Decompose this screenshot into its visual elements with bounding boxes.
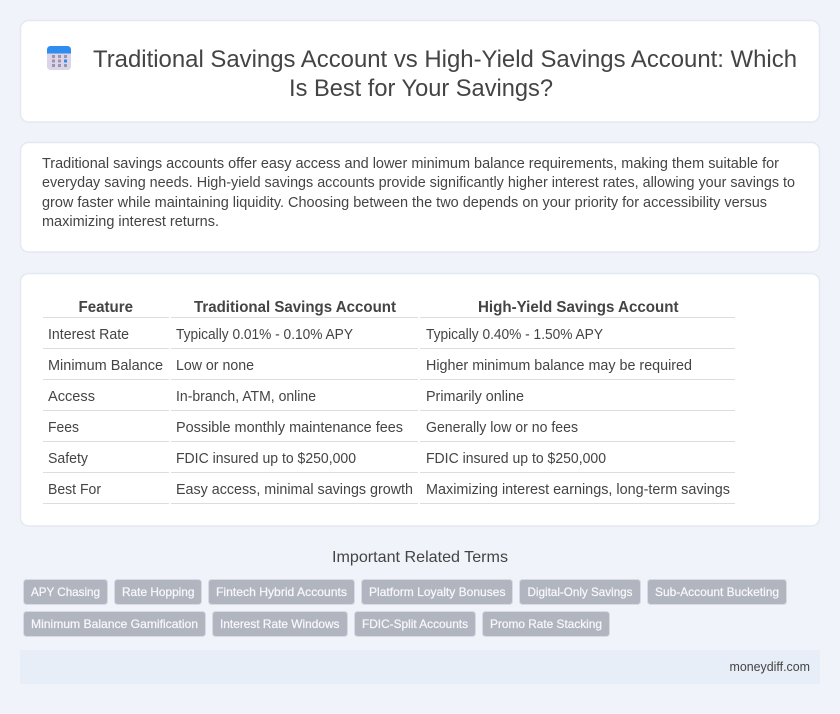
intro text: maximizing interest returns.	[42, 214, 219, 230]
tag: Digital-Only Savings	[520, 580, 640, 604]
tag: Platform Loyalty Bonuses: Platform Loyalty Bonuses	[369, 585, 506, 599]
row: safety: FDIC insured up to $250,000	[426, 451, 606, 467]
row: best for	[48, 482, 730, 498]
row: fees: Generally low or no fees	[426, 420, 578, 436]
table header	[78, 299, 679, 316]
tag: Promo Rate Stacking: Promo Rate Stacking	[490, 617, 602, 631]
row: interest rate	[48, 327, 603, 343]
row: best for: Best For	[48, 482, 101, 498]
icon: calendar	[47, 46, 71, 70]
panel: related term tags	[24, 580, 786, 636]
row: fees	[48, 420, 578, 436]
row: best for: Maximizing interest earnings, long-term savings	[426, 482, 730, 498]
tag: Interest Rate Windows	[212, 612, 348, 636]
tag: Sub-Account Bucketing: Sub-Account Bucketing	[655, 585, 779, 599]
panel: comparison table	[20, 274, 820, 526]
tag: Fintech Hybrid Accounts	[208, 580, 354, 604]
row: access	[48, 389, 524, 405]
row: fees: Possible monthly maintenance fees	[176, 420, 403, 436]
heading: related terms: Important Related Terms	[332, 549, 508, 566]
table header: Traditional Savings Account	[194, 299, 397, 316]
tag: Rate Hopping: Rate Hopping	[122, 585, 194, 599]
row: fees: Fees	[48, 420, 79, 436]
tag: APY Chasing: APY Chasing	[31, 585, 100, 599]
row: minimum balance: Minimum Balance	[48, 358, 163, 374]
panel: header	[20, 20, 820, 122]
row: interest rate: Interest Rate	[48, 327, 129, 343]
tag: Interest Rate Windows: Interest Rate Windows	[220, 617, 340, 631]
tag: FDIC-Split Accounts	[354, 612, 476, 636]
row: safety: Safety	[48, 451, 89, 467]
table header: Feature	[78, 299, 133, 316]
intro text: Traditional savings accounts offer easy access and lower minimum balance requirements, making them suitable for	[42, 156, 779, 172]
intro text: grow faster while maintaining liquidity. Choosing between the two depends on your priority for accessibility versus	[42, 195, 767, 211]
row: interest rate: Typically 0.01% - 0.10% APY	[176, 327, 353, 343]
tag: Rate Hopping	[114, 580, 202, 604]
title: Is Best for Your Savings?	[289, 75, 553, 102]
tag: Promo Rate Stacking	[482, 612, 610, 636]
row: best for: Easy access, minimal savings growth	[176, 482, 413, 498]
tag: Sub-Account Bucketing	[648, 580, 786, 604]
tag: APY Chasing	[24, 580, 108, 604]
footer: moneydiff.com	[730, 660, 810, 674]
tag: Platform Loyalty Bonuses	[362, 580, 512, 604]
row: minimum balance: Low or none	[176, 358, 254, 374]
tag: Minimum Balance Gamification	[24, 612, 206, 636]
row: access: Primarily online	[426, 389, 524, 405]
title	[93, 46, 797, 102]
title: Traditional Savings Account vs High-Yield Savings Account: Which	[93, 46, 797, 73]
row: safety	[48, 451, 606, 467]
row: interest rate: Typically 0.40% - 1.50% APY	[426, 327, 603, 343]
footer	[20, 650, 820, 684]
row: minimum balance	[48, 358, 692, 374]
table header: High-Yield Savings Account	[478, 299, 679, 316]
tag: Fintech Hybrid Accounts: Fintech Hybrid Accounts	[216, 585, 347, 599]
intro text	[42, 156, 795, 230]
tag: Minimum Balance Gamification: Minimum Balance Gamification	[31, 617, 198, 631]
tag: Digital-Only Savings: Digital-Only Savings	[528, 585, 632, 599]
row: safety: FDIC insured up to $250,000	[176, 451, 356, 467]
row: minimum balance: Higher minimum balance may be required	[426, 358, 692, 374]
row: access: In-branch, ATM, online	[176, 389, 316, 405]
tag: FDIC-Split Accounts: FDIC-Split Accounts	[362, 617, 468, 631]
intro text: everyday saving needs. High-yield savings accounts provide significantly higher interest rates, allowing your savings to	[42, 175, 795, 191]
panel: introduction	[20, 142, 820, 252]
row: access: Access	[48, 389, 95, 405]
